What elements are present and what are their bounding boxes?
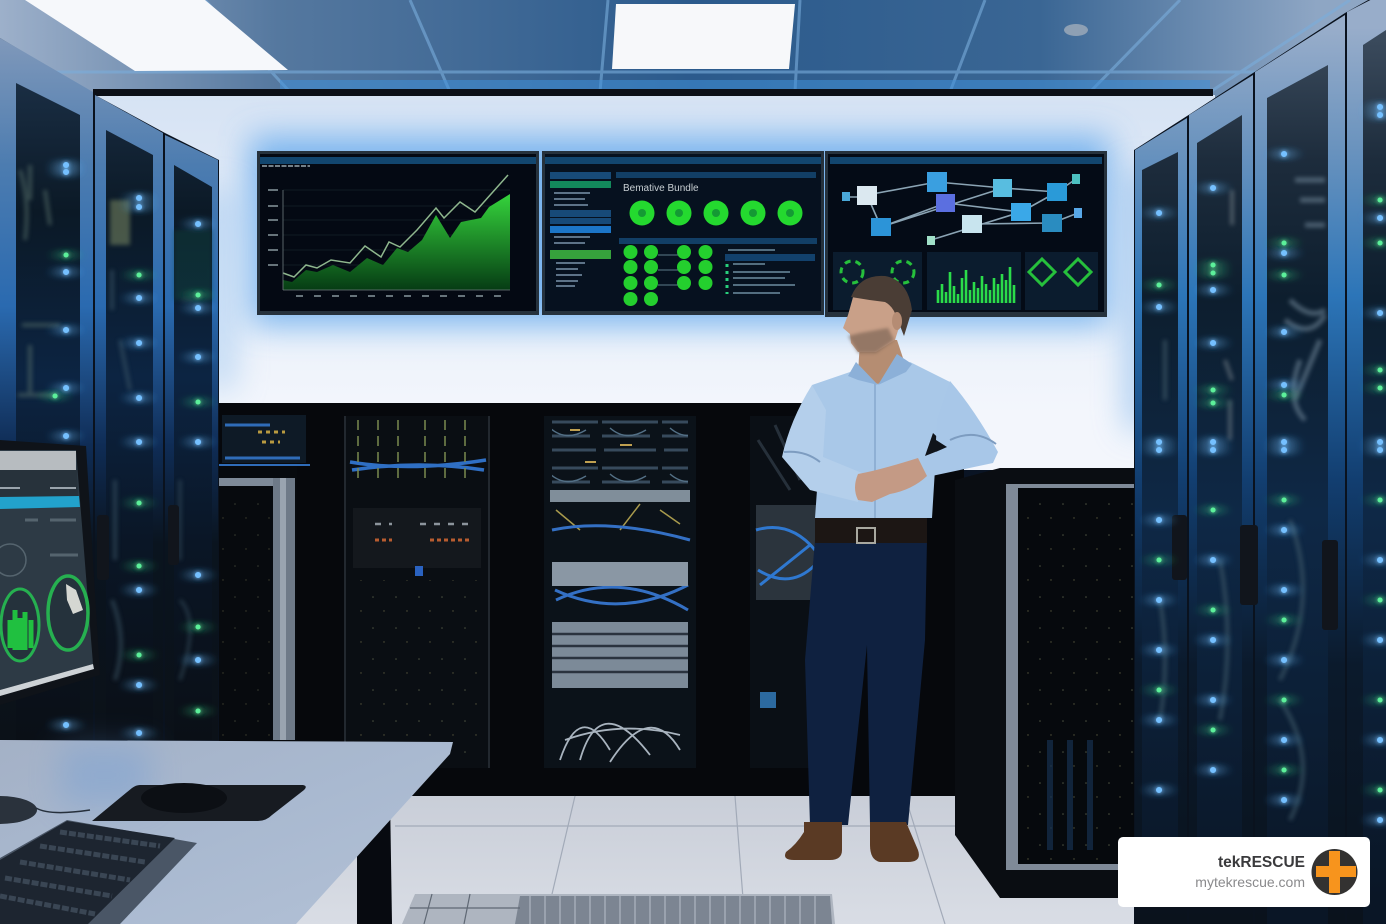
network nodes <box>842 172 1082 245</box>
arm gap <box>925 433 948 456</box>
sidebar <box>550 172 611 286</box>
torso <box>812 362 950 518</box>
lower rack wall <box>219 403 964 796</box>
blue status LEDs <box>66 165 198 733</box>
rack internals <box>18 165 212 680</box>
floor vent <box>402 894 835 924</box>
right low cabinet <box>955 468 1140 898</box>
right arm <box>922 381 998 477</box>
status circles <box>630 200 802 226</box>
right server racks <box>1134 0 1386 924</box>
monitor: network map <box>825 151 1107 317</box>
hands <box>855 458 927 502</box>
mouse <box>141 783 227 813</box>
desk leg <box>357 796 392 924</box>
collar <box>848 354 912 385</box>
ceiling light centre <box>612 4 795 69</box>
brand badge <box>1118 837 1370 907</box>
rack: left short cabinet top <box>222 415 306 463</box>
person <box>782 276 998 862</box>
ear <box>892 312 902 330</box>
legs <box>805 540 927 825</box>
logo: orange plus <box>1312 849 1358 895</box>
belt <box>815 518 927 543</box>
handles <box>1172 515 1338 630</box>
monitor foot <box>0 796 37 824</box>
left server racks <box>0 38 219 745</box>
ceiling bulkhead <box>93 89 1213 96</box>
ring widgets <box>841 259 1091 285</box>
brand name: tekRESCUE <box>1218 854 1305 871</box>
gauge rings <box>1 589 39 661</box>
desk monitor <box>0 440 100 705</box>
node grid <box>624 245 712 306</box>
brand url: mytekrescue.com <box>1195 874 1305 890</box>
rack: cable rack three <box>750 416 820 768</box>
rack: cable rack one <box>345 416 489 768</box>
neck <box>858 340 905 386</box>
screen heading: Bemative Bundle <box>623 183 699 194</box>
monitor: growth chart <box>257 151 539 315</box>
monitor: service dashboard <box>542 151 824 315</box>
beard <box>848 328 894 353</box>
back wall with blue glow <box>93 89 1215 470</box>
smoke detector <box>1064 24 1088 36</box>
handles <box>97 505 179 580</box>
ceiling light left <box>25 0 288 71</box>
left arm <box>782 385 862 502</box>
keyboard <box>0 820 197 924</box>
left low cabinet <box>219 463 310 740</box>
blue status LEDs <box>1159 107 1380 820</box>
green status LEDs <box>55 255 198 711</box>
mouse pad <box>92 785 306 821</box>
shoes <box>785 822 842 860</box>
rack internals <box>1160 180 1325 820</box>
bar chart <box>938 267 1014 303</box>
hair <box>851 276 912 336</box>
ceiling <box>0 0 1386 98</box>
green status LEDs <box>1159 200 1380 790</box>
desk <box>0 740 453 924</box>
face <box>843 285 905 352</box>
floor <box>290 796 1140 924</box>
rack: cable rack two <box>544 416 696 768</box>
